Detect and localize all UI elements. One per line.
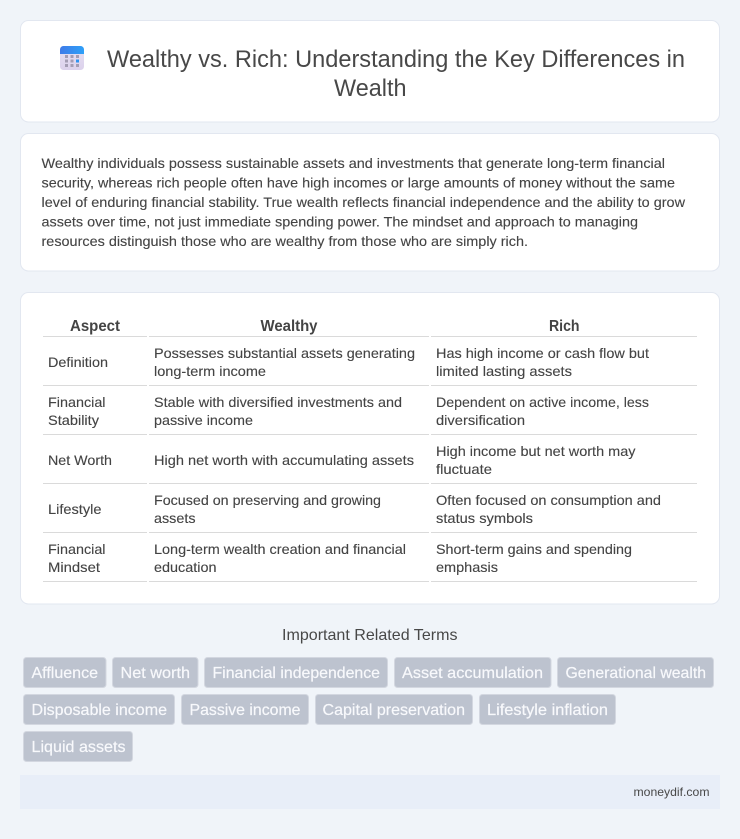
tag: capital preservation: Capital preservation	[322, 702, 465, 719]
row: definition: Possesses substantial assets generating	[154, 345, 415, 361]
text block: summary paragraph: level of enduring financial stability. True wealth reflects financial independence and the ability to grow	[42, 194, 686, 210]
row: financial mindset: emphasis	[436, 559, 498, 575]
tags: related terms	[24, 658, 714, 762]
tag: capital preservation	[316, 694, 472, 724]
icon: calendar	[60, 46, 84, 70]
row: lifestyle: Lifestyle	[48, 501, 102, 517]
row: definition: long-term income	[154, 363, 266, 379]
text block: summary paragraph: Wealthy individuals possess sustainable assets and investments that generate long-term financial	[42, 155, 665, 171]
tag: liquid assets: Liquid assets	[32, 739, 126, 756]
row: lifestyle: status symbols	[436, 510, 533, 526]
footer text: site: moneydif.com	[634, 785, 710, 799]
tag: affluence: Affluence	[32, 665, 98, 682]
title	[107, 46, 685, 102]
table header: Wealthy	[260, 318, 318, 335]
row: lifestyle	[48, 492, 661, 526]
row: net worth: High income but net worth may	[436, 443, 636, 459]
row: financial mindset: education	[154, 559, 216, 575]
tag: liquid assets	[24, 732, 132, 762]
tag: lifestyle inflation	[480, 694, 616, 724]
tag: disposable income: Disposable income	[32, 702, 167, 719]
title: Wealth	[334, 75, 406, 102]
row: lifestyle: Focused on preserving and growing	[154, 492, 381, 508]
text block: summary paragraph	[42, 155, 686, 249]
tag: net worth	[112, 658, 198, 688]
row: financial stability: Dependent on active income, less	[436, 394, 649, 410]
row: definition: Has high income or cash flow but	[436, 345, 649, 361]
tag: disposable income	[24, 694, 174, 724]
title: Wealthy vs. Rich: Understanding the Key Differences in	[107, 46, 685, 73]
row: net worth	[48, 443, 636, 477]
text block: summary paragraph: security, whereas rich people often have high incomes or large amounts of money without the same	[42, 174, 675, 190]
row: financial stability: Stable with diversified investments and	[154, 394, 402, 410]
row: financial stability: Stability	[48, 412, 99, 428]
row: definition: limited lasting assets	[436, 363, 572, 379]
table header	[70, 318, 580, 335]
tag: generational wealth	[558, 658, 714, 688]
row: definition: Definition	[48, 354, 108, 370]
row: financial stability: diversification	[436, 412, 525, 428]
tag: generational wealth: Generational wealth	[566, 665, 706, 682]
row: definition	[48, 345, 649, 379]
panel: comparison table	[20, 292, 720, 604]
row: financial stability	[48, 394, 649, 428]
tag: financial independence	[204, 658, 388, 688]
tag: financial independence: Financial independence	[212, 665, 380, 682]
tag: net worth: Net worth	[120, 665, 190, 682]
text block: summary paragraph: assets over time, not just immediate spending power. The mindset and approach to managing	[42, 214, 638, 230]
tag: passive income	[182, 694, 308, 724]
row: financial stability: Financial	[48, 394, 106, 410]
row: financial mindset	[48, 541, 632, 575]
row: net worth: Net Worth	[48, 452, 112, 468]
tag: lifestyle inflation: Lifestyle inflation	[487, 702, 608, 719]
tag: asset accumulation	[394, 658, 551, 688]
panel: summary	[20, 134, 720, 271]
row: financial mindset: Long-term wealth creation and financial	[154, 541, 406, 557]
footer	[20, 775, 720, 809]
table header: Rich	[549, 318, 580, 335]
row: financial mindset: Financial	[48, 541, 106, 557]
row: lifestyle: Often focused on consumption and	[436, 492, 661, 508]
tag: passive income: Passive income	[190, 702, 301, 719]
heading: important related terms: Important Related Terms	[282, 627, 458, 644]
tag: asset accumulation: Asset accumulation	[402, 665, 543, 682]
row: lifestyle: assets	[154, 510, 196, 526]
row: financial mindset: Mindset	[48, 559, 100, 575]
row: net worth: High net worth with accumulating assets	[154, 452, 414, 468]
tag: affluence	[24, 658, 106, 688]
panel: title header	[20, 20, 720, 122]
text block: summary paragraph: resources distinguish those who are wealthy from those who are simply rich.	[42, 233, 528, 249]
table header: Aspect	[70, 318, 121, 335]
row: financial mindset: Short-term gains and spending	[436, 541, 632, 557]
row: financial stability: passive income	[154, 412, 253, 428]
row: net worth: fluctuate	[436, 461, 492, 477]
